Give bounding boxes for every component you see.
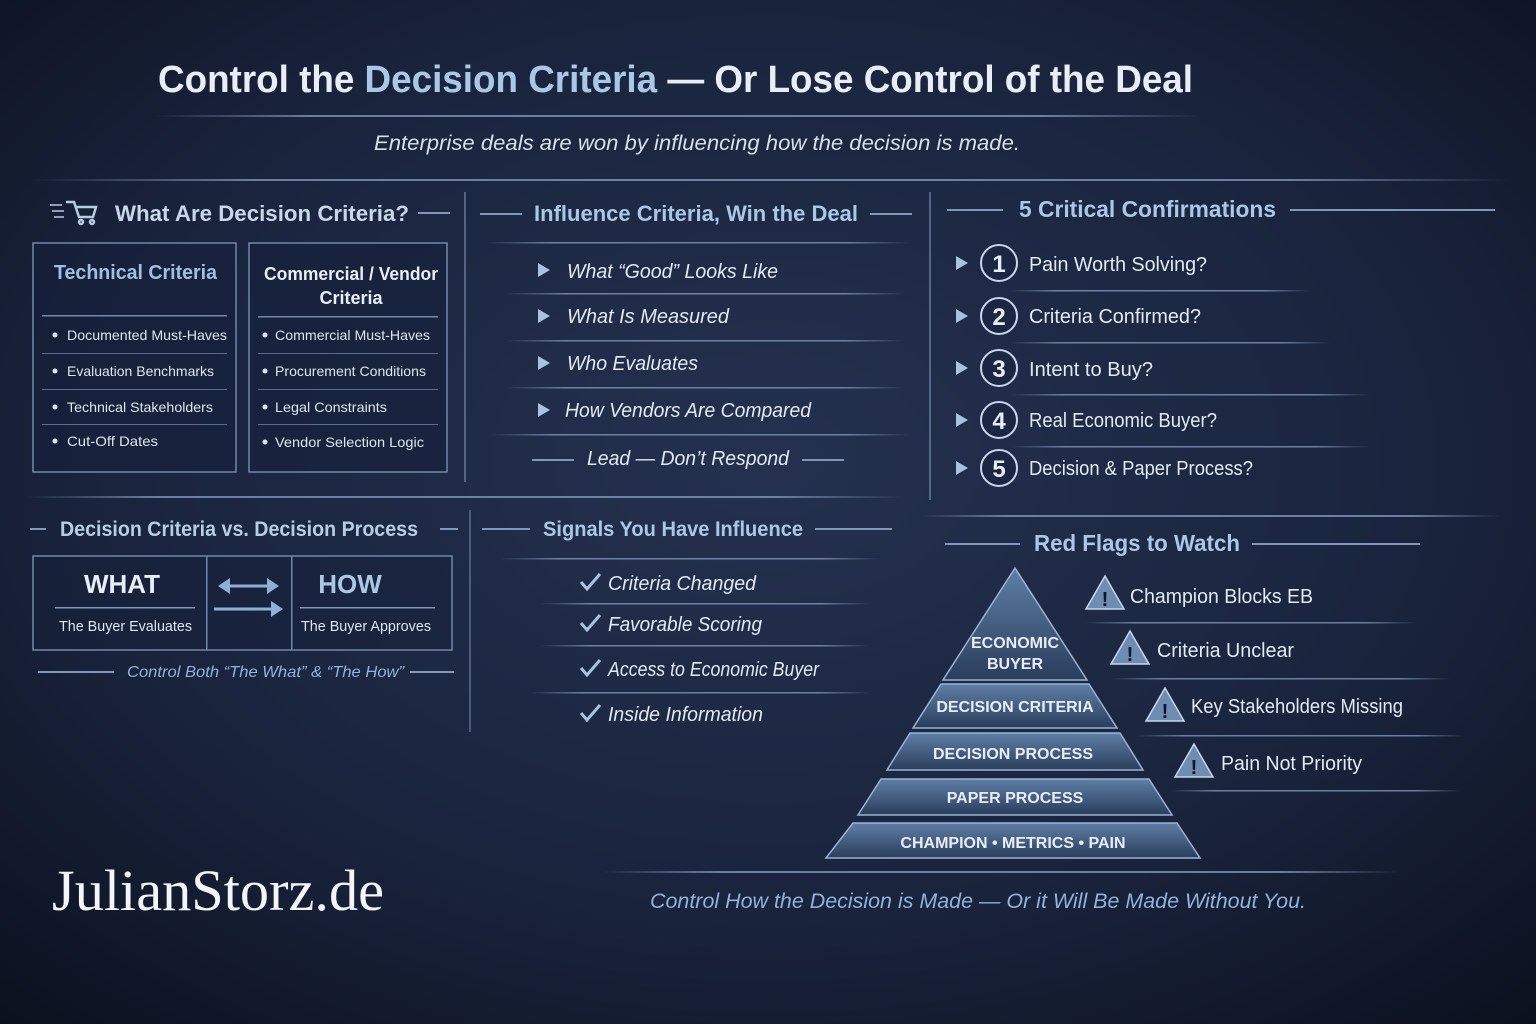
icons: warning [1086, 576, 1213, 777]
box: commercial criteria: Commercial Must-Haves [275, 327, 430, 343]
panel: signals: Inside Information [608, 704, 763, 726]
panel: influence criteria: Who Evaluates [567, 353, 698, 375]
box: technical criteria: Cut-Off Dates [67, 433, 158, 449]
panel: red flags: ! [1191, 757, 1197, 779]
panel: red flags: Champion Blocks EB [1130, 586, 1313, 608]
box: technical criteria: Documented Must-Haves [67, 327, 227, 343]
panel: 5 critical confirmations: 5 Critical Confirmations [1019, 196, 1276, 222]
panel: influence criteria [480, 201, 912, 470]
panel: red flags: ! [1102, 589, 1108, 611]
panel: 5 critical confirmations: Decision & Paper Process? [1029, 458, 1253, 480]
panel: criteria vs process: HOW [318, 569, 382, 599]
box: commercial criteria: Procurement Conditions [275, 363, 426, 379]
panel: red flags: Red Flags to Watch [1034, 530, 1240, 556]
panel: 5 critical confirmations: 3 [992, 356, 1006, 383]
panel: influence criteria: What “Good” Looks Like [567, 261, 778, 283]
box: commercial criteria: Criteria [319, 288, 384, 308]
panel: red flags [826, 530, 1465, 858]
panel: criteria vs process: The Buyer Approves [301, 618, 431, 635]
panel: red flags: Criteria Unclear [1157, 640, 1294, 662]
panel: criteria vs process: WHAT [84, 569, 160, 599]
box: commercial criteria: Legal Constraints [275, 399, 387, 415]
panel: criteria vs process: Decision Criteria vs. Decision Process [60, 518, 418, 541]
panel: signals: Signals You Have Influence [543, 518, 803, 541]
box: commercial criteria: Vendor Selection Logic [275, 434, 424, 450]
panel: criteria vs process: The Buyer Evaluates [59, 618, 192, 635]
panel: red flags: Pain Not Priority [1221, 753, 1362, 775]
panel: 5 critical confirmations: Criteria Confirmed? [1029, 306, 1201, 328]
panel: 5 critical confirmations: 1 [992, 251, 1006, 278]
box: technical criteria: Evaluation Benchmarks [67, 363, 214, 379]
panel: 5 critical confirmations: 5 [992, 456, 1006, 483]
tagline: Control How the Decision is Made — Or it Will Be Made Without You. [650, 890, 1306, 913]
panel: 5 critical confirmations: 2 [992, 304, 1006, 331]
panel: influence criteria: How Vendors Are Compared [565, 400, 812, 422]
panel: red flags: Key Stakeholders Missing [1191, 696, 1403, 718]
icon: arrows [214, 578, 283, 617]
box: technical criteria: Technical Stakeholders [67, 399, 213, 415]
panel: criteria vs process [30, 518, 458, 681]
subtitle: Enterprise deals are won by influencing how the decision is made. [374, 132, 1020, 155]
panel: signals: Access to Economic Buyer [607, 659, 820, 681]
panel: 5 critical confirmations: Real Economic Buyer? [1029, 410, 1217, 432]
panel: influence criteria: Lead — Don’t Respond [587, 448, 790, 470]
panel: criteria vs process: Control Both “The What” & “The How” [127, 664, 405, 681]
panel: 5 critical confirmations: Intent to Buy? [1029, 359, 1153, 381]
panel: influence criteria: Influence Criteria, Win the Deal [534, 201, 858, 226]
box: commercial criteria [249, 243, 447, 472]
title: Control the Decision Criteria — Or Lose Control of the Deal [158, 59, 1193, 101]
pyramid [826, 568, 1200, 858]
icon: cart [50, 202, 96, 224]
panel: 5 critical confirmations [947, 196, 1495, 486]
panel: signals [482, 518, 892, 726]
box: commercial criteria: Commercial / Vendor [264, 264, 438, 284]
brand: JulianStorz.de [52, 858, 384, 923]
panel: red flags: PAPER PROCESS [947, 790, 1084, 807]
panel: signals: Favorable Scoring [608, 614, 762, 636]
panel: 5 critical confirmations: 4 [992, 408, 1006, 435]
panel: what are decision criteria: What Are Decision Criteria? [115, 201, 409, 226]
panel: red flags: DECISION PROCESS [933, 746, 1093, 763]
panel: signals: Criteria Changed [608, 573, 757, 595]
panel: red flags: ! [1127, 644, 1133, 666]
panel: red flags: ! [1162, 701, 1168, 723]
panel: influence criteria: What Is Measured [567, 306, 730, 328]
box: technical criteria: Technical Criteria [54, 262, 218, 284]
panel: what are decision criteria [33, 201, 450, 472]
box: technical criteria [33, 243, 236, 472]
panel: red flags: BUYER [987, 656, 1043, 673]
panel: red flags: ECONOMIC [971, 635, 1059, 652]
panel: 5 critical confirmations: Pain Worth Solving? [1029, 254, 1207, 276]
panel: red flags: DECISION CRITERIA [936, 699, 1094, 716]
panel: red flags: CHAMPION • METRICS • PAIN [900, 835, 1126, 852]
